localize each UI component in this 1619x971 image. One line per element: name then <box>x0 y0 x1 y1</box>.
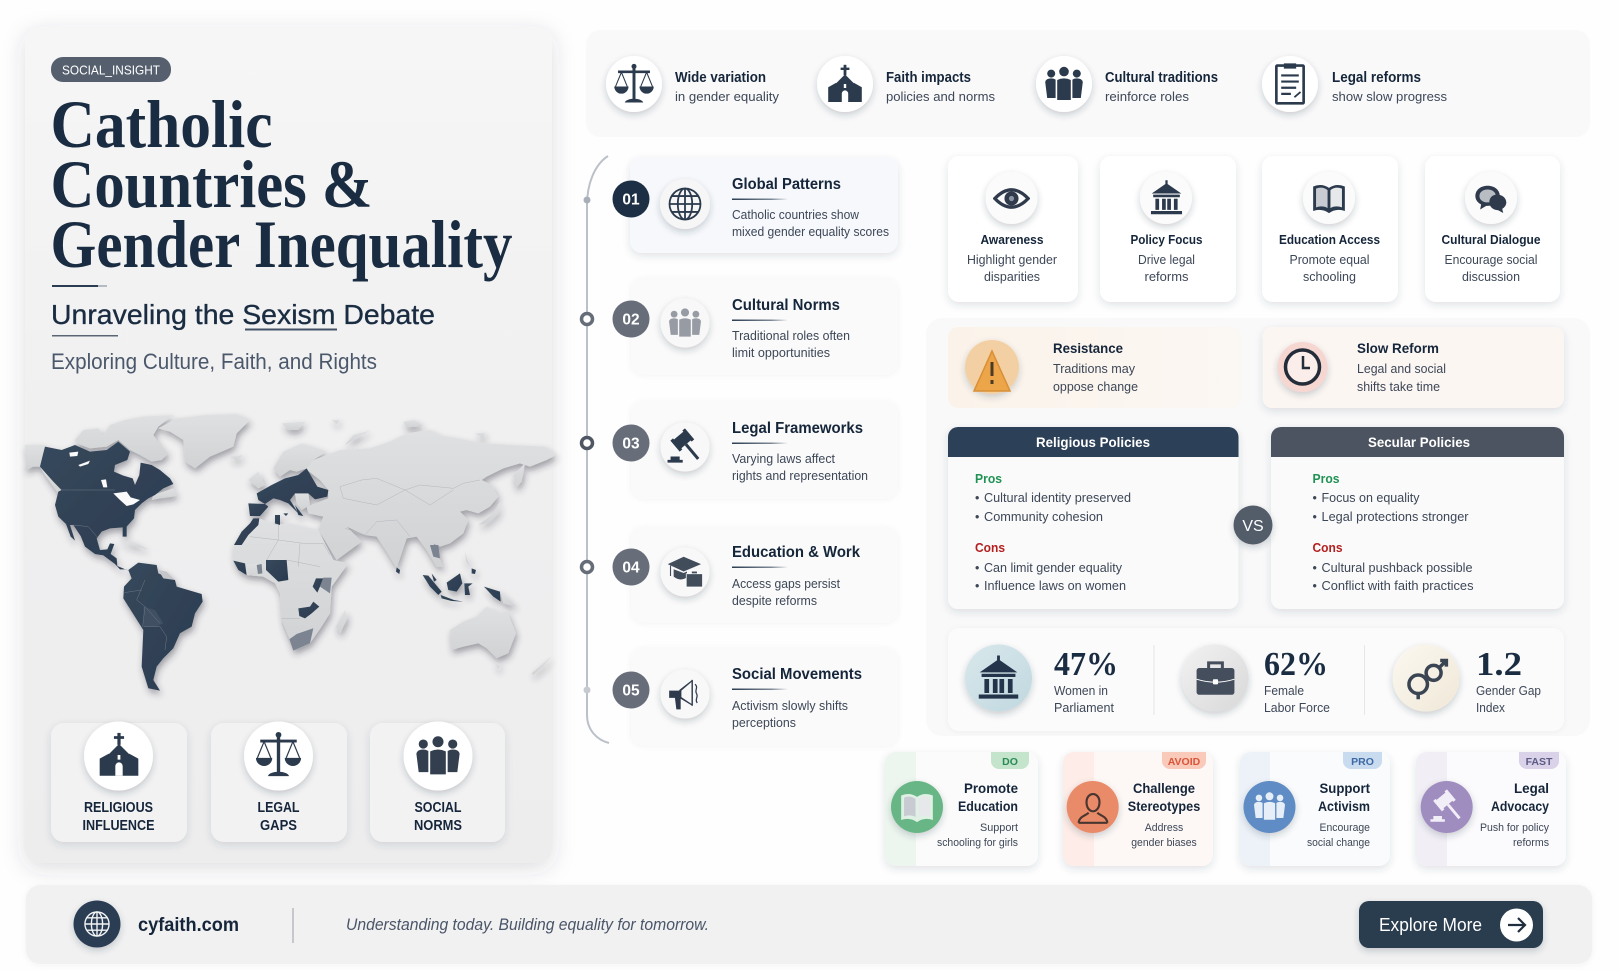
icon: scales <box>244 722 313 790</box>
step 01: global patterns: Catholic countries show <box>732 208 860 222</box>
card: resistance: oppose change <box>1053 380 1138 394</box>
card: education access <box>1262 156 1398 302</box>
card: religious policies <box>948 427 1238 609</box>
stat: women in parliament: Women in <box>1054 684 1108 698</box>
step 03: legal frameworks: rights and representation <box>732 469 868 483</box>
card: secular policies: Pros <box>1312 471 1340 486</box>
card: religious policies: • <box>975 510 979 524</box>
step 02: cultural norms: limit opportunities <box>732 346 830 360</box>
card: cultural dialogue: discussion <box>1462 270 1520 284</box>
step 04: education and work: Education & Work <box>732 544 860 561</box>
card: policy focus: Policy Focus <box>1130 232 1202 247</box>
card: challenge stereotypes: Address <box>1145 822 1184 834</box>
card: religious policies: Cultural identity preserved <box>984 491 1131 505</box>
card: legal gaps: LEGAL <box>258 800 300 816</box>
button: explore more: Explore More <box>1379 915 1482 935</box>
point: wide variation: Wide variation <box>675 70 766 86</box>
card: awareness: Highlight gender <box>967 253 1057 267</box>
point: legal reforms: show slow progress <box>1332 89 1448 104</box>
stat: gender gap index: Gender Gap <box>1476 684 1541 698</box>
step 04: education and work <box>612 527 898 622</box>
badge: VS <box>1234 506 1272 544</box>
title: Catholic <box>50 86 272 162</box>
card: resistance: Resistance <box>1053 340 1123 356</box>
step 04: education and work: 04 <box>622 560 640 576</box>
hero panel background <box>25 28 552 863</box>
step 02: cultural norms: Cultural Norms <box>732 297 840 314</box>
card: education access: schooling <box>1303 270 1356 284</box>
card: education access: Education Access <box>1279 232 1380 247</box>
card: secular policies: • <box>1312 510 1317 524</box>
stat: gender gap index: Index <box>1476 701 1506 715</box>
step 03: legal frameworks <box>612 401 898 498</box>
card: secular policies: Legal protections stronger <box>1322 510 1468 524</box>
step 01: global patterns <box>612 157 898 253</box>
card: secular policies: • <box>1312 561 1317 575</box>
card: legal advocacy <box>1416 752 1566 866</box>
card: legal advocacy: FAST <box>1526 756 1553 768</box>
title: Gender Inequality <box>50 206 512 282</box>
card: cultural dialogue: Cultural Dialogue <box>1442 232 1540 247</box>
card: promote education: Support <box>980 822 1018 834</box>
stat: women in parliament: Parliament <box>1054 701 1115 715</box>
card: secular policies: • <box>1312 579 1317 593</box>
step 03: legal frameworks: Varying laws affect <box>732 452 836 466</box>
point: faith impacts <box>817 56 995 112</box>
stat: women in parliament: 47% <box>1054 646 1118 683</box>
card: policy focus: reforms <box>1144 270 1188 284</box>
step 05: social movements: 05 <box>622 682 640 700</box>
card: religious policies: Community cohesion <box>984 510 1103 524</box>
step 04: education and work: Access gaps persist <box>732 577 840 591</box>
badge: SOCIAL_INSIGHT: SOCIAL_INSIGHT <box>62 64 160 78</box>
card: secular policies <box>1271 427 1564 609</box>
panel: top key points strip <box>586 30 1590 137</box>
card: secular policies: Focus on equality <box>1322 491 1420 505</box>
card: legal gaps: GAPS <box>260 818 297 834</box>
footer bar <box>26 885 1592 964</box>
point: wide variation: in gender equality <box>675 89 779 104</box>
panel: four action cards <box>948 156 1560 302</box>
point: legal reforms: Legal reforms <box>1332 70 1421 86</box>
card: promote education: schooling for girls <box>937 837 1018 849</box>
card: awareness: disparities <box>984 270 1040 284</box>
card: religious policies: Pros <box>975 471 1002 486</box>
card: challenge stereotypes: Challenge <box>1133 780 1195 796</box>
card: religious policies: • <box>975 561 979 575</box>
card: legal gaps <box>211 722 347 842</box>
card: religious policies: Can limit gender equality <box>984 561 1123 575</box>
step 02: cultural norms <box>612 278 898 374</box>
point: cultural traditions: reinforce roles <box>1105 89 1190 104</box>
card: slow reform: Slow Reform <box>1357 340 1439 356</box>
card: religious influence: INFLUENCE <box>82 818 155 834</box>
card: promote education: Promote <box>964 780 1018 796</box>
point: cultural traditions: Cultural traditions <box>1105 70 1218 86</box>
card: cultural dialogue: Encourage social <box>1444 253 1538 267</box>
card: legal advocacy: Advocacy <box>1491 798 1549 814</box>
card: religious policies: Religious Policies <box>1036 434 1150 450</box>
point: legal reforms <box>1262 56 1448 112</box>
card: social norms: NORMS <box>414 818 462 834</box>
card: policy focus: Drive legal <box>1138 253 1195 267</box>
card: secular policies: Cultural pushback possible <box>1322 561 1473 575</box>
tagline: Exploring Culture, Faith, and Rights <box>51 349 377 374</box>
strip background <box>586 30 1590 137</box>
step 01: global patterns: Global Patterns <box>732 176 841 193</box>
card: social norms <box>370 722 505 842</box>
step 01: global patterns: 01 <box>622 192 640 208</box>
card: education access: Promote equal <box>1290 253 1370 267</box>
map: Europe, Africa, Asia and Oceania <box>233 420 556 675</box>
timeline <box>582 156 898 745</box>
title <box>50 86 512 282</box>
point: faith impacts: Faith impacts <box>886 70 971 86</box>
card: legal advocacy: reforms <box>1513 837 1549 849</box>
card: promote education: Education <box>958 798 1018 814</box>
step 01: global patterns: mixed gender equality scores <box>732 225 889 239</box>
card: promote education: DO <box>1002 756 1018 768</box>
icon: clock <box>1278 342 1328 392</box>
icon: warning <box>965 340 1019 394</box>
card: support activism: Encourage <box>1320 822 1370 834</box>
tagline: Understanding today. Building equality for tomorrow. <box>346 916 709 934</box>
step 05: social movements: Social Movements <box>732 666 862 683</box>
title: Countries & <box>50 146 372 222</box>
card: slow reform <box>1262 327 1564 408</box>
step 05: social movements: perceptions <box>732 716 796 730</box>
card: secular policies: Conflict with faith practices <box>1322 579 1474 593</box>
card: social norms: SOCIAL <box>414 800 462 816</box>
card: religious policies: Influence laws on women <box>984 579 1126 593</box>
card: legal advocacy: Legal <box>1514 780 1549 796</box>
badge: VS: VS <box>1242 518 1264 535</box>
card: support activism: PRO <box>1351 756 1374 768</box>
card: support activism: Activism <box>1318 798 1370 814</box>
stat: gender gap index: 1.2 <box>1476 646 1522 683</box>
stat: female labor force <box>1182 644 1330 715</box>
subtitle: Unraveling the Sexism Debate <box>51 299 435 330</box>
panel: recommendation cards <box>885 752 1566 866</box>
stat: female labor force: Female <box>1264 684 1304 698</box>
card: awareness: Awareness <box>980 232 1044 247</box>
panel: left hero <box>25 28 556 863</box>
point: faith impacts: policies and norms <box>886 89 995 104</box>
timeline spine <box>587 156 609 743</box>
card: awareness <box>948 156 1078 302</box>
card: slow reform: Legal and social <box>1357 362 1446 376</box>
panel: statistics <box>948 628 1564 731</box>
card: policy focus <box>1100 156 1236 302</box>
button: explore more <box>1359 901 1543 948</box>
card: religious policies: Cons <box>975 540 1005 555</box>
step 02: cultural norms: 02 <box>622 312 640 328</box>
step 03: legal frameworks: Legal Frameworks <box>732 420 863 437</box>
world map <box>25 414 556 691</box>
section background <box>926 318 1590 736</box>
badge: SOCIAL_INSIGHT <box>51 57 171 82</box>
step 05: social movements: Activism slowly shifts <box>732 699 848 713</box>
card: challenge stereotypes <box>1063 752 1213 866</box>
point: wide variation <box>606 56 779 112</box>
card: resistance: Traditions may <box>1053 362 1136 376</box>
stat: female labor force: Labor Force <box>1264 701 1330 715</box>
card: religious influence: RELIGIOUS <box>84 800 153 816</box>
panel: challenges, comparison and stats <box>926 318 1590 736</box>
card: challenge stereotypes: Stereotypes <box>1128 798 1200 814</box>
card: resistance <box>948 327 1241 408</box>
card: religious policies: • <box>975 579 979 593</box>
card: slow reform: shifts take time <box>1357 380 1440 394</box>
card: legal advocacy: Push for policy <box>1480 822 1549 834</box>
card: support activism: social change <box>1307 837 1370 849</box>
step 05: social movements <box>612 648 898 745</box>
step 02: cultural norms: Traditional roles often <box>732 329 850 343</box>
stat: gender gap index <box>1392 644 1541 715</box>
card: challenge stereotypes: gender biases <box>1131 837 1197 849</box>
step 04: education and work: despite reforms <box>732 594 817 608</box>
icon: church <box>84 722 153 790</box>
card: support activism <box>1240 752 1390 866</box>
card: promote education <box>885 752 1038 866</box>
card: secular policies: • <box>1312 491 1317 505</box>
stat: women in parliament <box>965 644 1118 715</box>
step 03: legal frameworks: 03 <box>622 436 640 452</box>
icon: people <box>404 722 472 790</box>
stat: female labor force: 62% <box>1264 646 1328 683</box>
card: secular policies: Secular Policies <box>1368 434 1470 450</box>
icon: footer globe <box>74 900 120 948</box>
card: religious influence <box>51 722 187 842</box>
card: cultural dialogue <box>1425 156 1560 302</box>
card: religious policies: • <box>975 491 979 505</box>
card: secular policies: Cons <box>1312 540 1342 555</box>
card: support activism: Support <box>1320 780 1370 796</box>
map: Americas and Greenland <box>25 414 250 691</box>
point: cultural traditions <box>1036 56 1218 112</box>
card: challenge stereotypes: AVOID <box>1168 756 1201 768</box>
website: cyfaith.com <box>138 915 239 936</box>
